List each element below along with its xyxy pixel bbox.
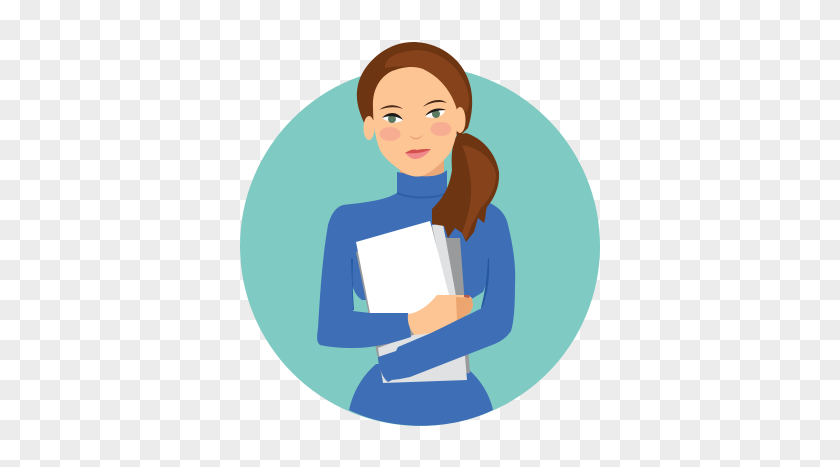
teal circle background bbox=[240, 66, 600, 426]
right arm sleeve bbox=[378, 201, 515, 382]
nose bbox=[409, 134, 423, 139]
arm shadow right bbox=[481, 258, 490, 309]
folder bbox=[356, 221, 470, 383]
torso bbox=[343, 190, 490, 300]
ears bbox=[364, 107, 466, 140]
hair back bbox=[357, 42, 472, 138]
ponytail bbox=[432, 133, 499, 242]
skirt bbox=[349, 364, 493, 426]
left eye and brow bbox=[379, 105, 403, 123]
hand bbox=[408, 295, 473, 335]
left arm sleeve bbox=[317, 205, 411, 348]
arm shadow left bbox=[349, 258, 354, 310]
blush left bbox=[380, 127, 400, 141]
collar shadow bbox=[397, 192, 447, 198]
neck bbox=[400, 150, 444, 178]
turtleneck collar bbox=[397, 170, 447, 198]
blush right bbox=[430, 122, 452, 136]
face bbox=[373, 67, 458, 177]
lips bbox=[405, 149, 431, 159]
right eye and brow bbox=[423, 100, 447, 118]
